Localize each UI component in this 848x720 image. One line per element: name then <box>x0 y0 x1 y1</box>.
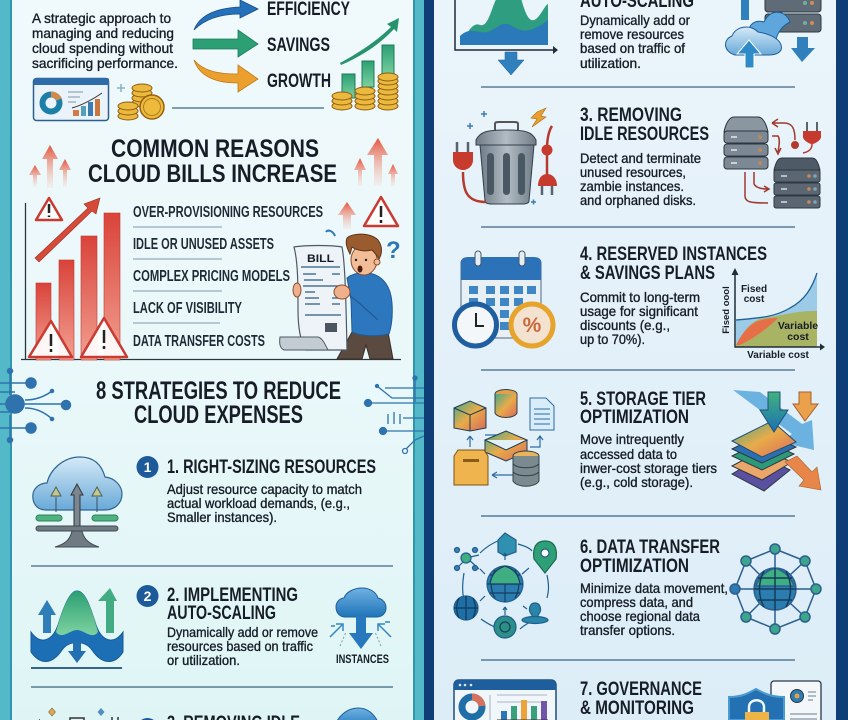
strategy 4 text: 4. RESERVED INSTANCES <box>580 244 767 265</box>
reasons list: COMPLEX PRICING MODELS <box>133 268 290 285</box>
divider <box>172 107 324 109</box>
strategy 4 text <box>580 244 767 347</box>
label: growth: GROWTH <box>267 71 331 92</box>
strategy 2 continuation text: remove resources <box>580 26 684 42</box>
icon: removing idle top preview <box>39 708 118 720</box>
number badge 3 <box>136 718 158 720</box>
divider <box>481 226 795 228</box>
strategy 4 text: & SAVINGS PLANS <box>580 263 715 284</box>
strategy 1 text: 1. RIGHT-SIZING RESOURCES <box>167 457 376 478</box>
divider <box>31 565 393 567</box>
strategy 4 text: Commit to long-term <box>580 289 700 305</box>
strategy 4 text: up to 70%). <box>580 331 645 347</box>
strategy 7 heading: & MONITORING <box>580 698 694 719</box>
icon: servers and clouds <box>726 0 821 68</box>
strategy 2 continuation text: based on traffic of <box>580 40 685 56</box>
strategy 6 text <box>580 537 728 638</box>
illustration: worried person with bill: ? <box>386 237 401 264</box>
icon: orange arrow <box>194 60 258 92</box>
strategy 3 text: zambie instances. <box>580 178 684 194</box>
chart: auto-scaling right <box>455 0 558 75</box>
strategy 6 text: OPTIMIZATION <box>580 556 689 577</box>
icon: monitoring dashboard <box>454 680 556 720</box>
chart: fixed vs variable cost: cost <box>744 294 765 305</box>
strategy 2 text: or utilization. <box>167 652 240 668</box>
strategy 1 text: Smaller instances). <box>167 509 277 525</box>
panel: left column <box>12 0 413 720</box>
strategy 5 text: OPTIMIZATION <box>580 407 689 428</box>
heading: 8 strategies: CLOUD EXPENSES <box>134 401 303 429</box>
reasons list: DATA TRANSFER COSTS <box>133 333 265 350</box>
panel: right column <box>434 0 836 720</box>
strategy 5 text: accessed data to <box>580 446 677 462</box>
icon: green arrow <box>193 30 258 57</box>
strategy 2 text: Dynamically add or remove <box>167 624 318 640</box>
chart: fixed vs variable cost: Fised oool <box>721 286 732 334</box>
icon: right circuit <box>364 376 424 454</box>
illustration: worried person with bill: BILL <box>307 253 334 265</box>
intro text <box>32 10 178 71</box>
chart: fixed vs variable cost: Variable <box>778 320 818 332</box>
strategy 6 text: compress data, and <box>580 594 693 610</box>
number badge 2 <box>136 585 158 607</box>
strategy 2 continuation text <box>580 0 694 71</box>
icon: data network left <box>454 533 556 638</box>
chart: fixed vs variable cost: Variable cost <box>747 350 810 361</box>
icon: left circuit <box>0 368 70 442</box>
divider <box>481 515 795 517</box>
strategy 1 text: Adjust resource capacity to match <box>167 481 362 497</box>
icon: global network right <box>730 544 821 634</box>
strategy 3 text: unused resources, <box>580 164 686 180</box>
icon: blue arrow <box>194 0 258 30</box>
strategy 2 continuation text: Dynamically add or <box>580 12 690 28</box>
heading: common reasons: COMMON REASONS <box>111 135 319 163</box>
number badge 2: 2 <box>144 588 152 604</box>
icon: dashboard <box>34 78 109 120</box>
strategy 6 text: transfer options. <box>580 622 675 638</box>
strategy 5 text: Move intrequently <box>580 431 684 447</box>
icon: growth bars and coins <box>332 18 399 110</box>
intro text: managing and reducing <box>32 25 174 41</box>
strategy 5 text: (e.g., cold storage). <box>580 474 693 490</box>
icon: auto-scaling wave <box>31 588 123 668</box>
intro text: cloud spending without <box>32 40 173 56</box>
icon: cloud top preview <box>334 708 385 720</box>
number badge 1: 1 <box>144 459 152 475</box>
strategy 2 text: AUTO-SCALING <box>167 603 276 624</box>
red arrows right <box>354 138 398 186</box>
divider <box>31 686 393 688</box>
chart: fixed vs variable cost: cost <box>787 331 809 343</box>
heading: common reasons <box>88 135 337 188</box>
strategy 6 text: Minimize data movement, <box>580 580 728 596</box>
heading: common reasons: CLOUD BILLS INCREASE <box>88 160 337 188</box>
strategy 6 text: choose regional data <box>580 608 700 624</box>
divider <box>481 86 795 88</box>
label: savings: SAVINGS <box>267 35 330 56</box>
red arrows left <box>29 145 71 188</box>
icon: storage tier layers <box>732 390 821 491</box>
chart: fixed vs variable cost <box>721 268 825 361</box>
reasons list: IDLE OR UNUSED ASSETS <box>133 236 274 253</box>
icon: server stacks <box>724 117 821 208</box>
strategy 1 text: actual workload demands, (e.g., <box>167 495 350 511</box>
strategy 4 text: discounts (e.g., <box>580 317 670 333</box>
strategy 4 text: usage for significant <box>580 303 698 319</box>
icon: cloud instances: INSTANCES <box>336 654 389 666</box>
icon: shield and report <box>729 681 821 720</box>
strategy 3 text: IDLE RESOURCES <box>580 124 709 145</box>
icon: warning triangles on chart <box>29 198 127 357</box>
strategy 5 text: 5. STORAGE TIER <box>580 389 706 410</box>
strategy 5 text: inwer-cost storage tiers <box>580 460 717 476</box>
divider <box>481 369 795 371</box>
icon: right-sizing cloud and scale <box>33 457 122 547</box>
icon: calendar, clock, percent: % <box>523 314 542 337</box>
divider <box>481 659 795 661</box>
icon: calendar, clock, percent <box>454 251 553 346</box>
bar chart: rising costs <box>21 198 401 360</box>
icon: coins <box>117 84 164 120</box>
strategy 7 heading <box>580 679 702 719</box>
reasons list: LACK OF VISIBILITY <box>133 300 242 317</box>
strategy 3 text: and orphaned disks. <box>580 192 696 208</box>
strategy 6 text: 6. DATA TRANSFER <box>580 537 720 558</box>
heading: 8 strategies: 8 STRATEGIES TO REDUCE <box>96 377 341 405</box>
icon: red arrow and warning <box>338 197 398 229</box>
strategy 2 text: 2. IMPLEMENTING <box>167 585 298 606</box>
strategy 3 text <box>580 105 709 208</box>
strategy 3 text: 3. REMOVING <box>580 105 682 126</box>
icon: trash can with plugs <box>453 108 557 204</box>
intro text: sacrificing performance. <box>32 55 178 71</box>
icon: storage boxes <box>454 390 554 486</box>
reasons list <box>133 204 323 350</box>
icon: cloud instances <box>330 588 391 666</box>
strategy 5 text <box>580 389 717 490</box>
heading: 8 strategies <box>96 377 341 429</box>
illustration: worried person with bill <box>280 231 401 359</box>
intro text: A strategic approach to <box>32 10 171 26</box>
strategy 2 text: resources based on traffic <box>167 638 313 654</box>
strategy 2 text <box>167 585 318 668</box>
number badge 1 <box>136 456 158 478</box>
strategy 2 continuation text: utilization. <box>580 55 641 71</box>
reasons list: OVER-PROVISIONING RESOURCES <box>133 204 323 221</box>
chart: fixed vs variable cost: Fised <box>741 284 767 295</box>
strategy 3 text: Detect and terminate <box>580 150 701 166</box>
strategy 7 heading: 7. GOVERNANCE <box>580 679 702 700</box>
strategy 1 text <box>167 457 376 525</box>
